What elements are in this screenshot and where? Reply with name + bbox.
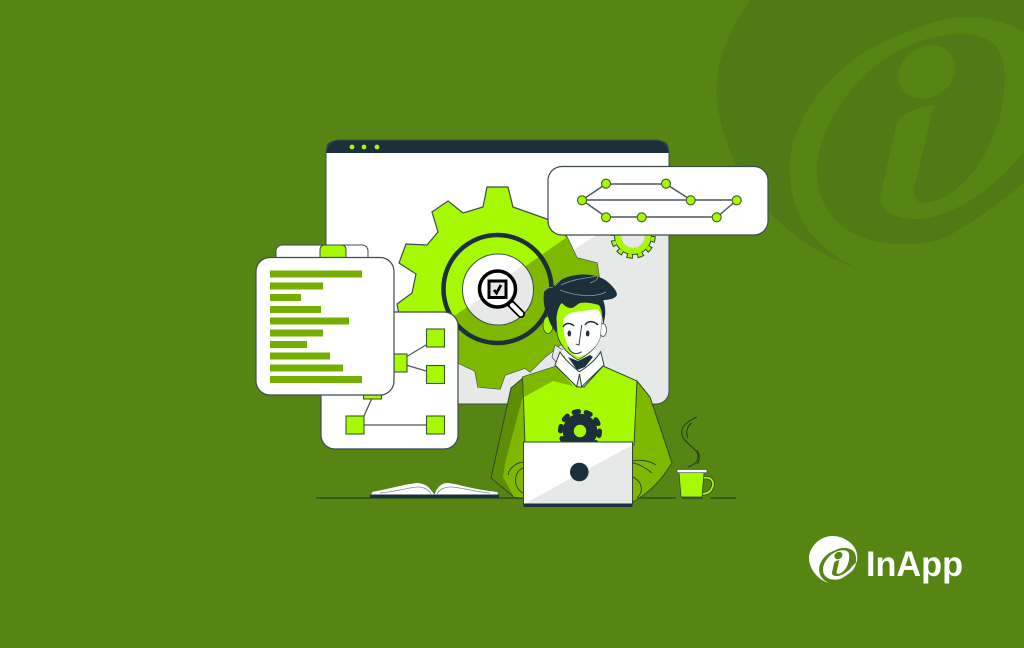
lens disc: [462, 254, 534, 325]
right sleeve: [628, 381, 672, 503]
steam: [682, 417, 699, 467]
left sleeve: [491, 378, 530, 500]
neck: [562, 350, 598, 372]
laptop: [524, 442, 632, 507]
logo wordmark: InApp: [866, 545, 963, 584]
person: [491, 274, 672, 503]
icon: magnifier with checkbox: [480, 271, 521, 314]
icon: vest gear: [560, 412, 600, 450]
left ear: [543, 316, 553, 334]
right ear: [600, 324, 606, 336]
document tabs: [276, 245, 368, 265]
browser window: [326, 140, 669, 404]
hair strands: [543, 274, 606, 296]
window title bar: [326, 140, 669, 153]
table line: [316, 497, 736, 499]
logo mark: [809, 536, 857, 583]
panel: document list: [256, 245, 394, 395]
hair: [544, 274, 617, 333]
document text bars: [270, 270, 362, 383]
book: [370, 483, 499, 498]
logo: InApp: [809, 536, 963, 584]
main gear: [397, 187, 600, 389]
watermark: InApp swoosh logo: [717, 0, 1024, 268]
face highlight: [563, 309, 602, 357]
gear ring: [444, 235, 552, 343]
panel: flow diagram: [321, 312, 458, 449]
shoulder backdrop: [552, 345, 566, 367]
face: [555, 300, 603, 360]
small gear: [613, 216, 653, 256]
panel: route network: [548, 166, 768, 235]
facial features: [563, 322, 598, 354]
window dots: [350, 145, 379, 149]
arm fold lines: [508, 460, 656, 498]
collar: [555, 352, 604, 387]
vest shadow: [523, 366, 573, 397]
coffee cup: [677, 470, 713, 497]
sweater vest: [523, 366, 637, 445]
